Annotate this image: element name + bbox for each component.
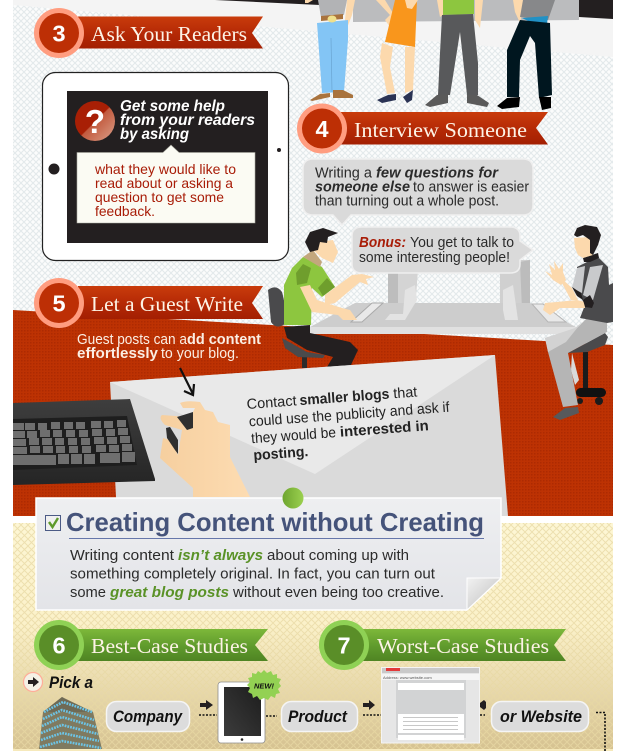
- badge: new: NEW!: [254, 682, 274, 690]
- office chair: [268, 287, 325, 368]
- section 5 ribbon: Let a Guest Write: [91, 292, 243, 316]
- icon: question mark: ?: [85, 103, 105, 140]
- person: man at right desk: [543, 225, 613, 420]
- card body: isn’t always: [178, 547, 263, 564]
- red floor background: [13, 310, 613, 516]
- hand on mouse: [160, 401, 250, 497]
- dotted connector going down: [596, 712, 605, 751]
- section 7 ribbon: 7: [337, 632, 351, 658]
- pin dot: [282, 488, 304, 508]
- section 3 ribbon: [34, 8, 263, 58]
- section 7 ribbon: [319, 620, 566, 670]
- section 7 ribbon: Worst-Case Studies: [377, 634, 549, 658]
- tablet heading: from your readers: [120, 112, 255, 129]
- arrow: company to tablet: [199, 700, 217, 715]
- badge: new: [247, 670, 281, 700]
- pill: company: Company: [113, 708, 183, 726]
- speech bubble: few questions: few questions for: [376, 166, 499, 182]
- keyboard: [13, 399, 155, 485]
- section 3 ribbon: 3: [52, 20, 66, 46]
- section 5 ribbon: 5: [52, 290, 66, 316]
- person: man at left desk: [268, 228, 374, 368]
- icon: office building: [39, 697, 102, 749]
- envelope text: that: [393, 385, 418, 402]
- speech bubble: bonus: [352, 227, 533, 273]
- note card: creating content without creating: [36, 488, 501, 610]
- card body: some: [70, 584, 106, 601]
- pick a label: Pick a: [49, 674, 93, 692]
- pill: or website: [492, 702, 588, 732]
- icon: question mark: [75, 101, 115, 141]
- guest post intro text: to your blog.: [161, 346, 239, 362]
- section 6 ribbon: Best-Case Studies: [91, 634, 248, 658]
- stool: [568, 333, 608, 405]
- arrow: product to browser: [363, 700, 381, 715]
- icon: pick arrow: [24, 672, 42, 692]
- person: blue jeans: [305, 0, 355, 101]
- white strip between sections: [13, 516, 613, 523]
- guest post intro text: effortlessly: [77, 346, 158, 362]
- card body: about coming up with: [267, 547, 409, 564]
- speech bubble: few questions: [303, 159, 533, 225]
- icon: checkbox: [46, 516, 60, 530]
- tablet callout box: what they would like to: [94, 161, 236, 177]
- card body: Writing content: [70, 547, 175, 564]
- guest post intro text: Guest posts can a: [77, 332, 188, 348]
- guest post intro text: dd content: [187, 332, 261, 348]
- speech bubble: few questions: to answer is easier: [413, 180, 529, 196]
- section 6 ribbon: 6: [52, 632, 66, 658]
- section 4 ribbon: 4: [315, 116, 329, 142]
- person: dark trousers: [497, 0, 555, 110]
- section 4 ribbon: Interview Someone: [354, 118, 527, 142]
- speech bubble: few questions: Writing a: [315, 166, 376, 182]
- person: green shirt and gray trousers: [425, 0, 489, 107]
- mouse: [166, 412, 193, 454]
- section 5 ribbon: [34, 278, 263, 328]
- tablet callout box: feedback.: [95, 203, 155, 219]
- tablet: ask your readers: [42, 72, 288, 260]
- card body: without even being too creative.: [232, 584, 444, 601]
- pill: or website: or Website: [500, 708, 582, 726]
- card title: Creating Content without Creating: [66, 507, 484, 537]
- dotted connector: tablet to product: [266, 715, 277, 717]
- tablet callout box: read about or asking a: [95, 175, 233, 191]
- desk with monitors: [310, 260, 576, 334]
- envelope text: smaller blogs: [299, 387, 390, 409]
- section 3 ribbon: Ask Your Readers: [91, 22, 247, 46]
- envelope text: could use the publicity and ask if: [248, 400, 451, 430]
- person: orange dress: [376, 0, 418, 103]
- arrow: browser to website: [480, 700, 486, 715]
- background: hatched upper section: [13, 0, 613, 520]
- envelope text: posting.: [253, 444, 309, 464]
- speech bubble: few questions: than turning out a whole post.: [315, 194, 499, 210]
- tablet callout box: [77, 145, 255, 223]
- section 4 ribbon: [297, 104, 548, 154]
- envelope: [110, 355, 508, 516]
- speech bubble: few questions: someone else: [315, 180, 410, 196]
- tablet heading: Get some help: [120, 98, 225, 115]
- icon: tablet product: [218, 682, 265, 743]
- speech bubble: bonus: some interesting people!: [359, 250, 510, 266]
- pill: company: [106, 702, 190, 732]
- card body: something completely original. In fact, you can turn out: [70, 566, 436, 582]
- icon: arrow to mouse: [180, 368, 194, 395]
- pill: product: [282, 702, 358, 732]
- tablet callout box: question to get some: [95, 189, 224, 205]
- cream lower background: [13, 523, 613, 751]
- section 6 ribbon: [34, 620, 268, 670]
- pill: product: Product: [288, 708, 348, 726]
- envelope text: interested in: [339, 418, 429, 441]
- speech bubble: bonus: You get to talk to: [410, 235, 514, 251]
- envelope text: Contact: [246, 393, 297, 413]
- group of standing people: [305, 0, 555, 110]
- icon: browser window: [382, 668, 480, 743]
- card body: great blog posts: [109, 584, 229, 601]
- speech bubble: bonus: Bonus:: [359, 235, 406, 251]
- envelope text: they would be: [251, 425, 337, 447]
- tablet heading: by asking: [120, 126, 190, 143]
- icon: browser window: Address: www.website.com: [383, 675, 432, 680]
- top wall band: [13, 0, 613, 57]
